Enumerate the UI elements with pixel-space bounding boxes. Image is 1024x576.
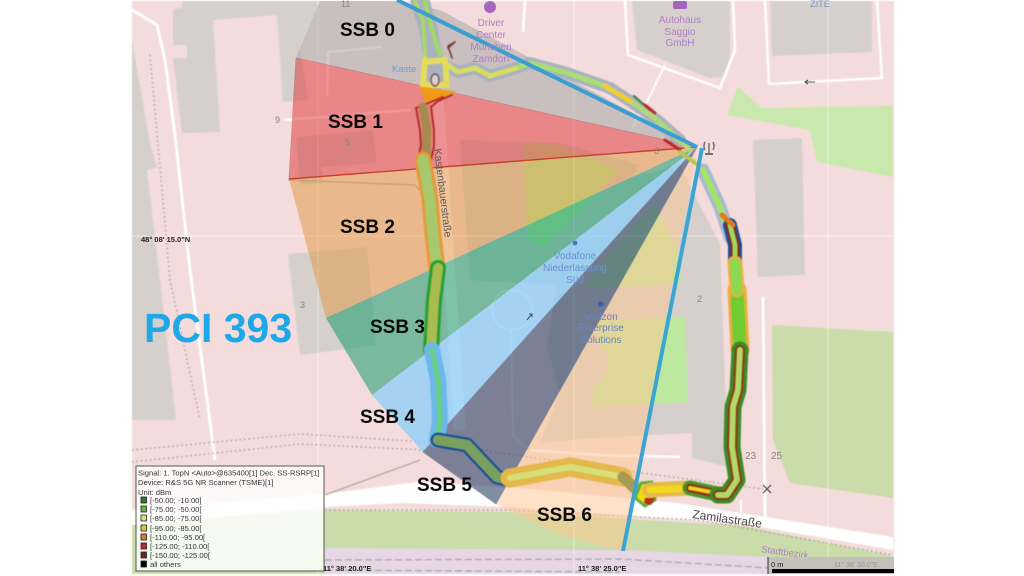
- house numbers: 6: [654, 146, 659, 156]
- scale bar: 0 m: [771, 560, 784, 569]
- legend ranges: [-75.00; -50.00[: [150, 505, 202, 514]
- scale bar: [768, 557, 894, 574]
- drive-test measurement track: [415, 1, 740, 506]
- POI: Driver Center: München: [470, 42, 512, 53]
- POI: Verizon Enterprise Solutions: Solutions: [580, 335, 622, 346]
- scale bar: 11° 38' 30.0"E: [834, 561, 878, 569]
- legend ranges: [-85.00; -75.00[: [150, 514, 202, 523]
- lawns and gardens: [132, 87, 893, 574]
- house numbers: 25: [771, 451, 783, 462]
- POI: Driver Center: Driver: [478, 18, 505, 29]
- beam sector SSB 3: [326, 147, 697, 395]
- legend ranges: [-95.00; -85.00[: [150, 524, 202, 533]
- area label: Stadtbezirk: Stadtbezirk: [761, 544, 809, 562]
- icon: one-way arrow: [805, 80, 815, 84]
- POI: Autohaus Saggio: Saggio: [664, 27, 696, 38]
- POI: Vodafone Niederlassung Süd: [543, 251, 607, 286]
- POI: Driver Center: Center: [476, 30, 507, 41]
- POI: Autohaus Saggio: Autohaus: [659, 15, 701, 26]
- blue beam boundary line lower: [623, 148, 702, 551]
- SSB beam labels: [328, 20, 592, 526]
- map base layer: [132, 1, 894, 574]
- POI: Vodafone Niederlassung Süd: Niederlassung: [543, 263, 607, 274]
- POI: Driver Center: Zamdorf: [472, 54, 510, 65]
- house numbers: [275, 0, 783, 462]
- roundabout patch: [423, 60, 447, 85]
- POI icon: Driver Center: [484, 1, 496, 13]
- legend ranges: [-50.00; -10.00]: [150, 496, 202, 505]
- icon: cell tower: [704, 142, 714, 154]
- POI: Verizon Enterprise Solutions: Enterprise: [578, 323, 624, 334]
- coordinate label latitude: 48° 08' 15.0"N: [141, 235, 190, 244]
- POI icon: Autohaus: [673, 1, 687, 9]
- legend header: Device: R&S 5G NR Scanner (TSME)[1]: [138, 478, 273, 487]
- SSB beam labels: SSB 0: [340, 20, 395, 41]
- legend ranges: all others: [150, 560, 181, 569]
- POI icon: Vodafone: [573, 241, 577, 245]
- buildings: [132, 1, 872, 467]
- beam sector SSB 0: [296, 1, 697, 147]
- POI: Vodafone Niederlassung Süd: Süd: [566, 275, 584, 286]
- beam sector SSB 4: [372, 147, 697, 452]
- coordinate label longitude 20: 11° 38' 20.0"E: [323, 564, 371, 573]
- legend ranges: [150, 496, 211, 569]
- POI: Driver Center: [470, 18, 512, 65]
- house numbers: 5: [345, 137, 350, 147]
- beam sector SSB 6: [496, 147, 697, 551]
- SSB beam labels: SSB 5: [417, 475, 472, 496]
- dotted footpaths: [132, 55, 893, 555]
- legend header: [138, 468, 320, 497]
- SSB beam labels: SSB 3: [370, 317, 425, 338]
- house numbers: 2: [697, 294, 702, 304]
- building outlines: [288, 180, 420, 190]
- legend ranges: [-110.00; -95.00[: [150, 533, 206, 542]
- legend ranges: [-125.00; -110.00[: [150, 542, 210, 551]
- legend header: Unit: dBm: [138, 488, 171, 497]
- SSB beam labels: SSB 1: [328, 112, 383, 133]
- house numbers: 9: [275, 115, 280, 125]
- legend ranges: [-150.00; -125.00[: [150, 551, 211, 560]
- map labels: [275, 0, 830, 562]
- beam sector SSB 2: [289, 147, 697, 318]
- POI icon: Verizon: [598, 301, 604, 307]
- street label: Kastenbauerstraße: Kastenbauerstraße: [431, 148, 454, 238]
- grid lines: [132, 1, 894, 574]
- SSB beam labels: SSB 2: [340, 217, 395, 238]
- street label: Zamilastraße: Zamilastraße: [692, 507, 763, 531]
- POI: Autohaus Saggio: GmbH: [666, 38, 694, 49]
- coordinate label longitude 25: 11° 38' 25.0"E: [578, 564, 626, 573]
- POI: Autohaus Saggio: [659, 15, 701, 49]
- beam sector SSB 1: [289, 58, 697, 179]
- icon: barrier cross: [763, 485, 771, 493]
- roads: [132, 1, 893, 550]
- legend swatches: [141, 497, 146, 567]
- track outer halo: [420, 1, 436, 88]
- beam sector SSB 5: [423, 147, 697, 504]
- house numbers: 23: [745, 451, 757, 462]
- PCI title: PCI 393: [144, 305, 292, 351]
- blue beam boundary line upper: [397, 0, 697, 147]
- POI: Kaste: Kaste: [392, 64, 416, 75]
- SSB beam labels: SSB 4: [360, 407, 415, 428]
- POI: Verizon Enterprise Solutions: [578, 312, 624, 346]
- railway lines: [325, 559, 770, 572]
- SSB beam labels: SSB 6: [537, 505, 592, 526]
- house numbers: 3: [300, 300, 305, 310]
- POI: Verizon Enterprise Solutions: Verizon: [584, 312, 618, 323]
- POI: Vodafone Niederlassung Süd: Vodafone: [554, 251, 597, 262]
- icon: roundabout arrow: [527, 314, 532, 320]
- legend header: Signal: 1. TopN <Auto>@635400[1] Dec. SS-RSRP[1]: [138, 468, 320, 478]
- legend panel: [136, 466, 324, 571]
